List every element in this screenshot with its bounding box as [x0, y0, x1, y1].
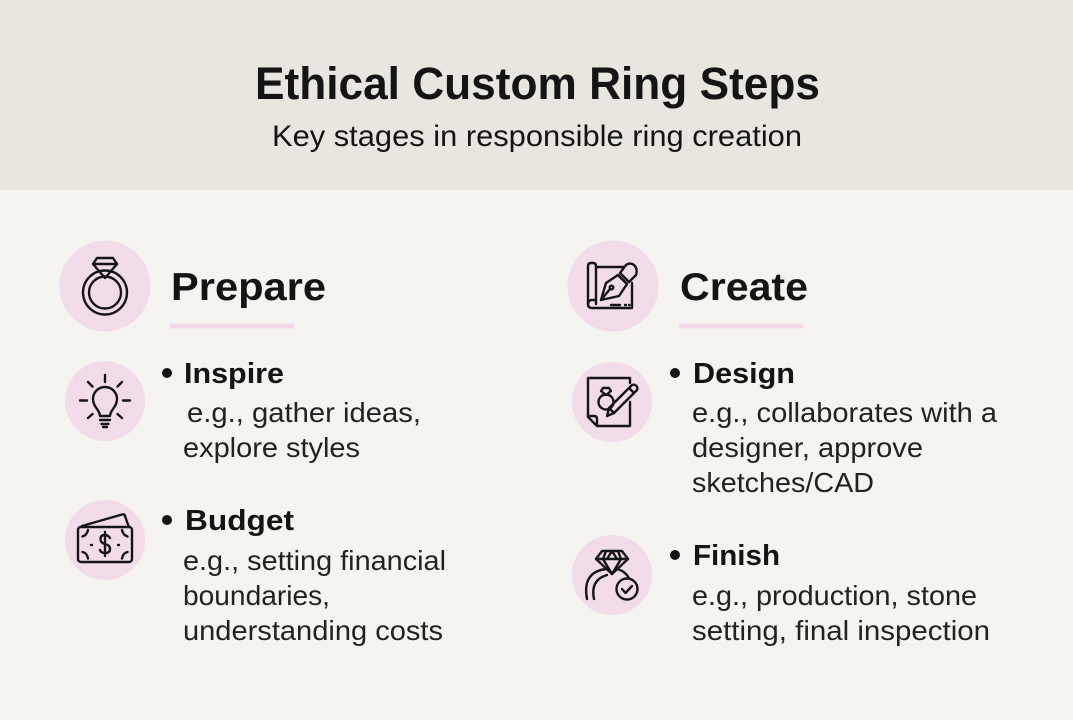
item: budget: [65, 500, 446, 646]
description: finish: setting, final inspection: [692, 615, 990, 646]
description: budget: e.g., setting financial: [183, 545, 446, 576]
description: inspire: explore styles: [183, 432, 360, 463]
description: design: [692, 397, 997, 498]
item: inspire: [65, 358, 421, 463]
label: finish: Finish: [693, 540, 780, 572]
description: budget: [183, 545, 446, 646]
label: inspire: Inspire: [184, 358, 284, 390]
description: budget: understanding costs: [183, 615, 443, 646]
title: Ethical Custom Ring Steps: [255, 58, 820, 109]
panel: prepare: [60, 240, 446, 646]
icon: banknotes: [65, 500, 145, 580]
heading: prepare: Prepare: [171, 266, 326, 309]
description: budget: boundaries,: [183, 580, 330, 611]
description: design: designer, approve: [692, 432, 923, 463]
panel: create: [568, 240, 997, 646]
icon: light bulb: [65, 361, 145, 441]
bullet: [162, 368, 172, 378]
bullet: [670, 550, 680, 560]
icon: ring sketch and pencil: [572, 362, 652, 442]
icon: blueprint and pen: [568, 240, 658, 332]
bullet: [670, 368, 680, 378]
description: inspire: [183, 397, 421, 463]
header band: [0, 0, 1073, 190]
heading: create: Create: [680, 266, 808, 309]
underline: create: [679, 324, 803, 328]
description: finish: [692, 580, 990, 646]
label: design: Design: [693, 358, 795, 390]
description: finish: e.g., production, stone: [692, 580, 977, 611]
bullet: [162, 515, 172, 525]
description: design: e.g., collaborates with a: [692, 397, 997, 428]
description: inspire: e.g., gather ideas,: [187, 397, 421, 428]
description: design: sketches/CAD: [692, 467, 874, 498]
underline: prepare: [170, 324, 294, 328]
icon: diamond ring: [60, 240, 150, 332]
item: design: [572, 358, 997, 498]
label: budget: Budget: [185, 505, 294, 537]
icon: finished ring with check: [572, 535, 652, 615]
subtitle: Key stages in responsible ring creation: [272, 120, 802, 153]
item: finish: [572, 535, 990, 646]
